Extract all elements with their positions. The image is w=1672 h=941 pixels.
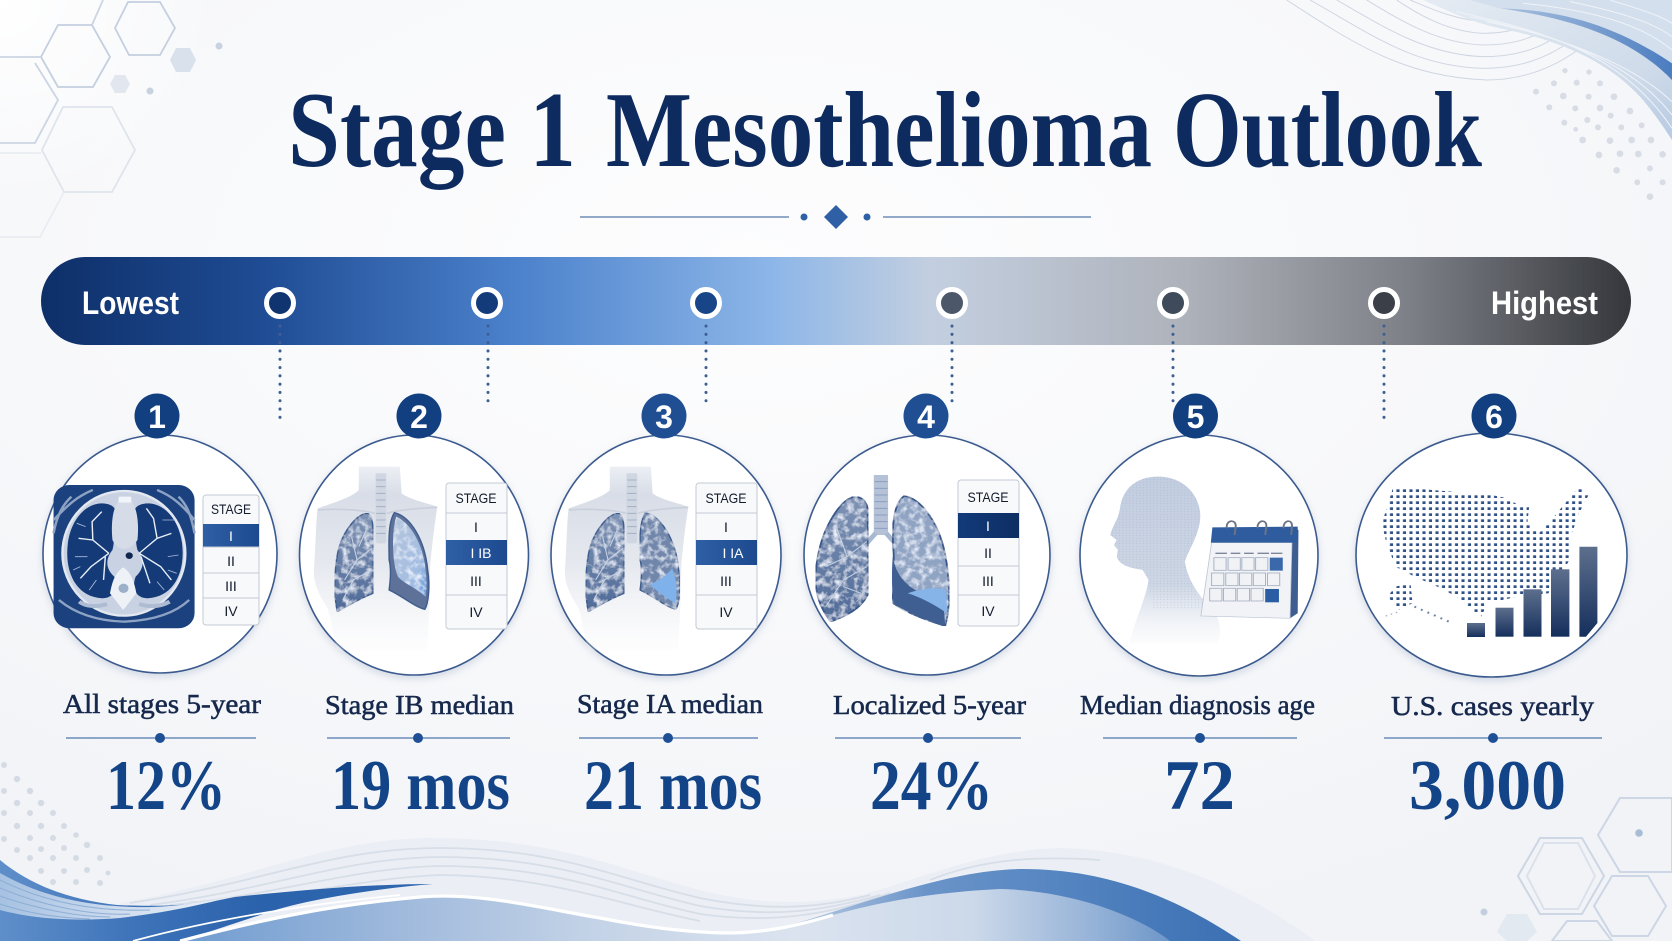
panel 6: U.S. cases yearly <box>1356 394 1627 825</box>
icon: lungs <box>816 475 949 626</box>
value: 21 mos <box>584 747 762 825</box>
stage table: I <box>474 519 478 535</box>
number badge 5 <box>1173 394 1218 438</box>
circle 3 <box>551 435 781 675</box>
divider <box>66 733 256 743</box>
stage table: STAGE <box>706 490 746 506</box>
stage table: STAGE <box>968 489 1008 505</box>
number badge 4 <box>904 394 948 438</box>
number badge 3: 3 <box>655 399 673 435</box>
label: Median diagnosis age <box>1080 690 1315 720</box>
circle 4 <box>804 435 1050 675</box>
icon: rising bar chart <box>1467 547 1597 637</box>
title: Mesothelioma <box>606 71 1152 190</box>
number badge 3 <box>642 394 686 438</box>
scale marker 1 <box>266 290 294 316</box>
number badge 6: 6 <box>1485 399 1503 435</box>
value: 24% <box>870 747 993 825</box>
divider <box>835 733 1021 743</box>
stage table <box>958 480 1019 626</box>
divider <box>1384 733 1602 743</box>
title ornament <box>580 205 1091 229</box>
stage table: STAGE <box>211 501 251 517</box>
ribbon lines <box>130 848 1100 921</box>
stage table: IV <box>981 603 995 619</box>
number badge 1 <box>134 394 180 438</box>
title: Stage 1 <box>288 71 576 190</box>
number badge 5: 5 <box>1187 399 1204 435</box>
circle 1 <box>43 435 277 673</box>
icon: dotted U.S. map <box>1382 487 1589 622</box>
dots decoration: top right <box>1533 68 1666 200</box>
stage table: I <box>986 518 990 534</box>
stage table: I IB <box>470 545 492 561</box>
scale marker 6 <box>1370 290 1398 316</box>
title <box>288 71 1482 190</box>
number badge 2: 2 <box>410 399 428 435</box>
value: 72 <box>1164 747 1235 825</box>
main pale fill with continuous gradient <box>180 889 1170 941</box>
scale label: highest: Highest <box>1491 285 1598 321</box>
pale ribbon band <box>0 838 1316 941</box>
stage table: I <box>229 528 233 544</box>
stage table: II <box>984 545 992 561</box>
top-left glow <box>0 0 220 200</box>
dotted connectors <box>280 326 1384 418</box>
icon: head profile <box>1110 477 1220 643</box>
label: Localized 5-year <box>833 690 1026 720</box>
value: 19 mos <box>331 747 510 825</box>
white ribbon edge <box>180 896 833 941</box>
circle 5 <box>1080 435 1318 676</box>
panel 3: stage IA median <box>551 394 781 825</box>
stage table <box>203 495 259 625</box>
icon: torso with lungs, IA highlight <box>565 467 688 650</box>
title: Outlook <box>1173 71 1482 190</box>
panel 5: median diagnosis age <box>1080 394 1318 825</box>
stage table: IV <box>469 604 483 620</box>
stage table: IV <box>719 604 733 620</box>
pale striped wedge, left <box>0 873 235 920</box>
label: Stage IA median <box>577 689 764 719</box>
scale marker 5 <box>1160 290 1186 316</box>
scale marker 3 <box>692 290 720 316</box>
stage table: I IA <box>722 545 744 561</box>
number badge 4: 4 <box>917 399 935 435</box>
divider <box>579 733 758 743</box>
stage table: STAGE <box>456 490 496 506</box>
scale marker 2 <box>474 290 500 316</box>
hexagon decoration: bottom right <box>1480 798 1672 941</box>
label: All stages 5-year <box>63 689 261 719</box>
hexagon decoration: top left <box>0 0 222 237</box>
stage table <box>696 483 757 629</box>
circle 2 <box>300 435 528 675</box>
stage table: II <box>227 553 235 569</box>
label: Stage IB median <box>325 690 515 720</box>
icon: torso with lungs, IB highlight <box>314 467 437 650</box>
icon: CT scan <box>54 485 195 628</box>
stage table: III <box>982 573 994 589</box>
panel 1: all stages 5-year <box>43 394 277 825</box>
value: 3,000 <box>1409 747 1566 825</box>
scale label: lowest: Lowest <box>82 285 179 321</box>
scale marker 4 <box>938 290 966 316</box>
blue wave, left <box>0 860 433 941</box>
divider <box>327 733 510 743</box>
value: 12% <box>106 747 226 825</box>
label: U.S. cases yearly <box>1391 691 1595 721</box>
dots decoration: bottom left <box>1 762 110 886</box>
stage table: I <box>724 519 728 535</box>
circle 6 <box>1356 433 1627 677</box>
panel 4: localized 5-year <box>804 394 1050 825</box>
divider <box>1103 733 1297 743</box>
stage table: III <box>720 573 732 589</box>
white ribbon lines <box>133 895 400 941</box>
blue crest, right <box>790 869 1241 941</box>
number badge 6 <box>1472 394 1516 438</box>
panel 2: stage IB median <box>300 394 528 825</box>
wave decoration: top right <box>1287 0 1672 140</box>
stage table: III <box>225 578 237 594</box>
stage table <box>446 483 507 629</box>
stage table: III <box>470 573 482 589</box>
number badge 1: 1 <box>148 399 166 435</box>
scale bar: lowest to highest <box>41 257 1631 345</box>
icon: calendar <box>1201 521 1298 618</box>
stage table: IV <box>224 603 238 619</box>
wave decoration: bottom <box>0 838 1316 941</box>
number badge 2 <box>396 394 442 438</box>
wedge lines <box>0 880 150 919</box>
